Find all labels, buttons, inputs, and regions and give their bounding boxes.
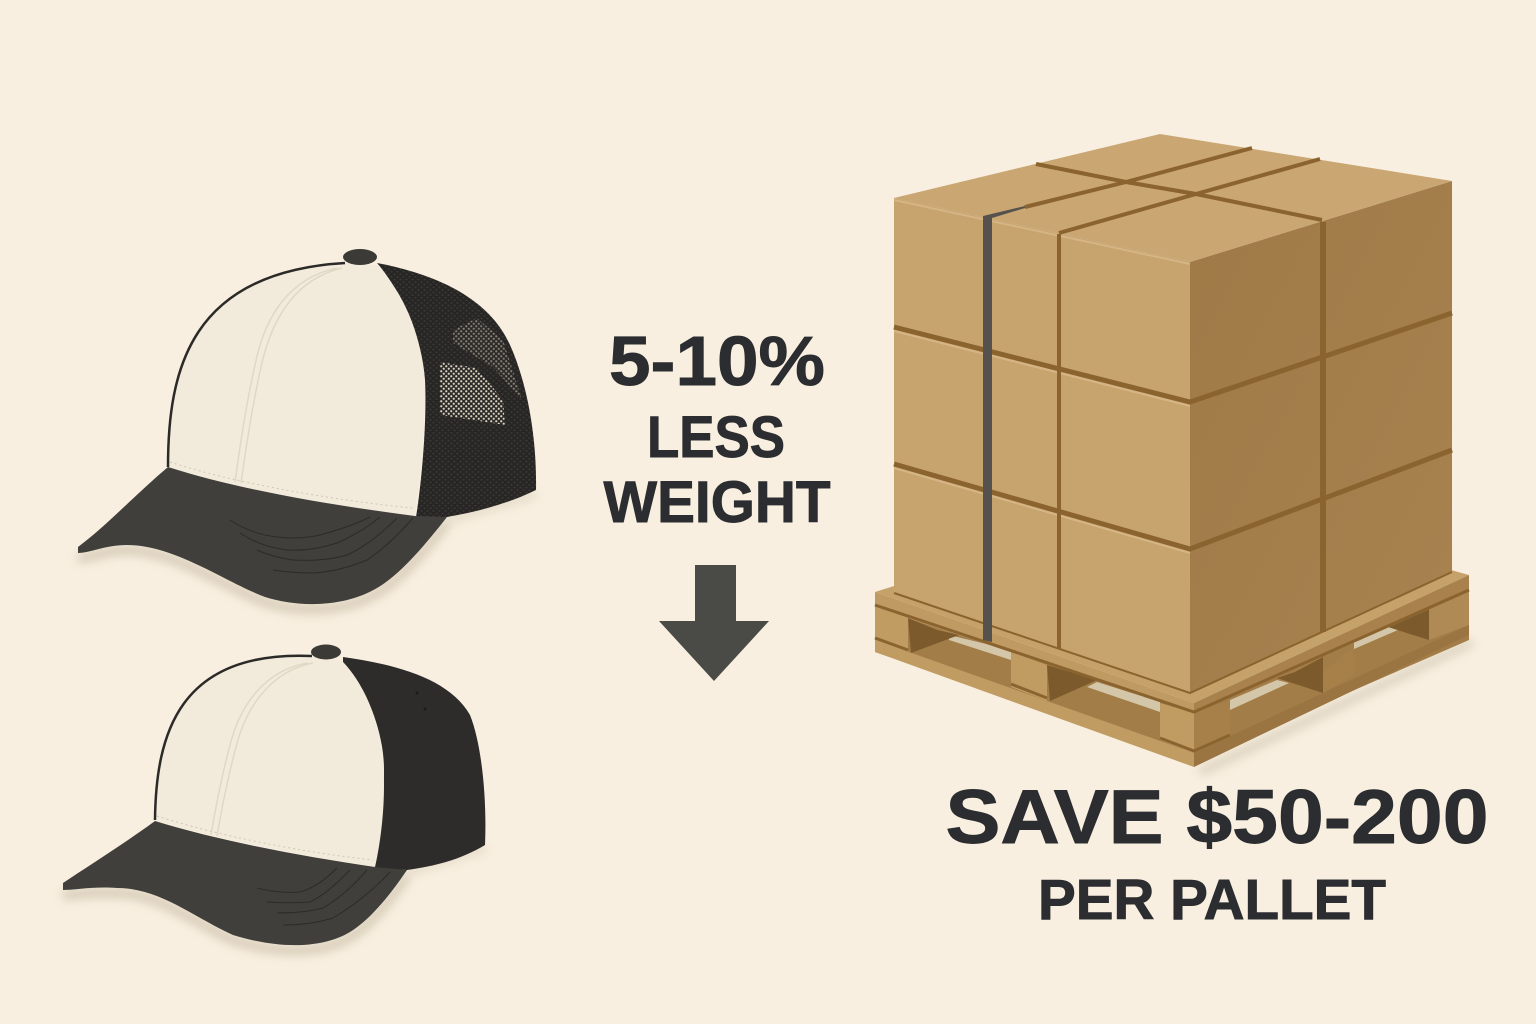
blocks [875,592,1469,753]
brim [63,821,407,945]
shipping strap [983,206,1025,642]
block inner sides [908,608,1429,701]
brim [78,467,447,604]
top face seams [1025,148,1322,233]
per pallet label: PER PALLET [1038,868,1386,932]
panel seam [211,663,313,836]
white front panel [168,263,425,516]
mesh see-through patches [440,318,522,425]
mesh back panel [377,263,536,517]
savings headline [946,775,1488,932]
deck right edge [1194,575,1469,713]
pallet ground shadow [1200,642,1472,772]
solid dark back panel [343,657,485,870]
weight label: WEIGHT [604,470,830,535]
deck underside line [875,590,1469,712]
see-through gaps [949,627,1398,712]
save amount: SAVE $50-200 [946,775,1488,860]
underside surface [875,592,1469,760]
deck left edge [875,592,1194,713]
left face [894,198,1190,693]
less label: LESS [647,405,785,470]
bottom board right [1194,625,1469,767]
front stitching [157,816,373,860]
white front panel [155,656,384,867]
center stat: 5-10% less weight [604,322,830,535]
horizontal seams [894,313,1452,549]
vertical seams [1059,222,1323,649]
crown button [311,644,341,660]
hat with solid back [63,644,485,950]
stacked cartons [894,134,1452,693]
percent figure: 5-10% [609,322,825,400]
right face [1190,181,1452,693]
seam highlights [894,200,1190,553]
front stitching [170,462,413,508]
pallet [875,570,1472,772]
deck top surface [875,570,1469,703]
carton base line [894,572,1452,693]
block dark bands [875,638,1230,751]
down arrow [659,565,769,681]
top face [894,134,1452,262]
crown button [343,249,377,265]
crown outline [155,656,312,820]
crown outline [168,263,345,467]
back vent eyelets [416,692,426,710]
brim stitching arcs [230,517,413,573]
hat with mesh back [78,249,536,609]
panel seam [235,268,342,483]
bottom board left [875,640,1194,767]
brim stitching arcs [257,868,390,925]
